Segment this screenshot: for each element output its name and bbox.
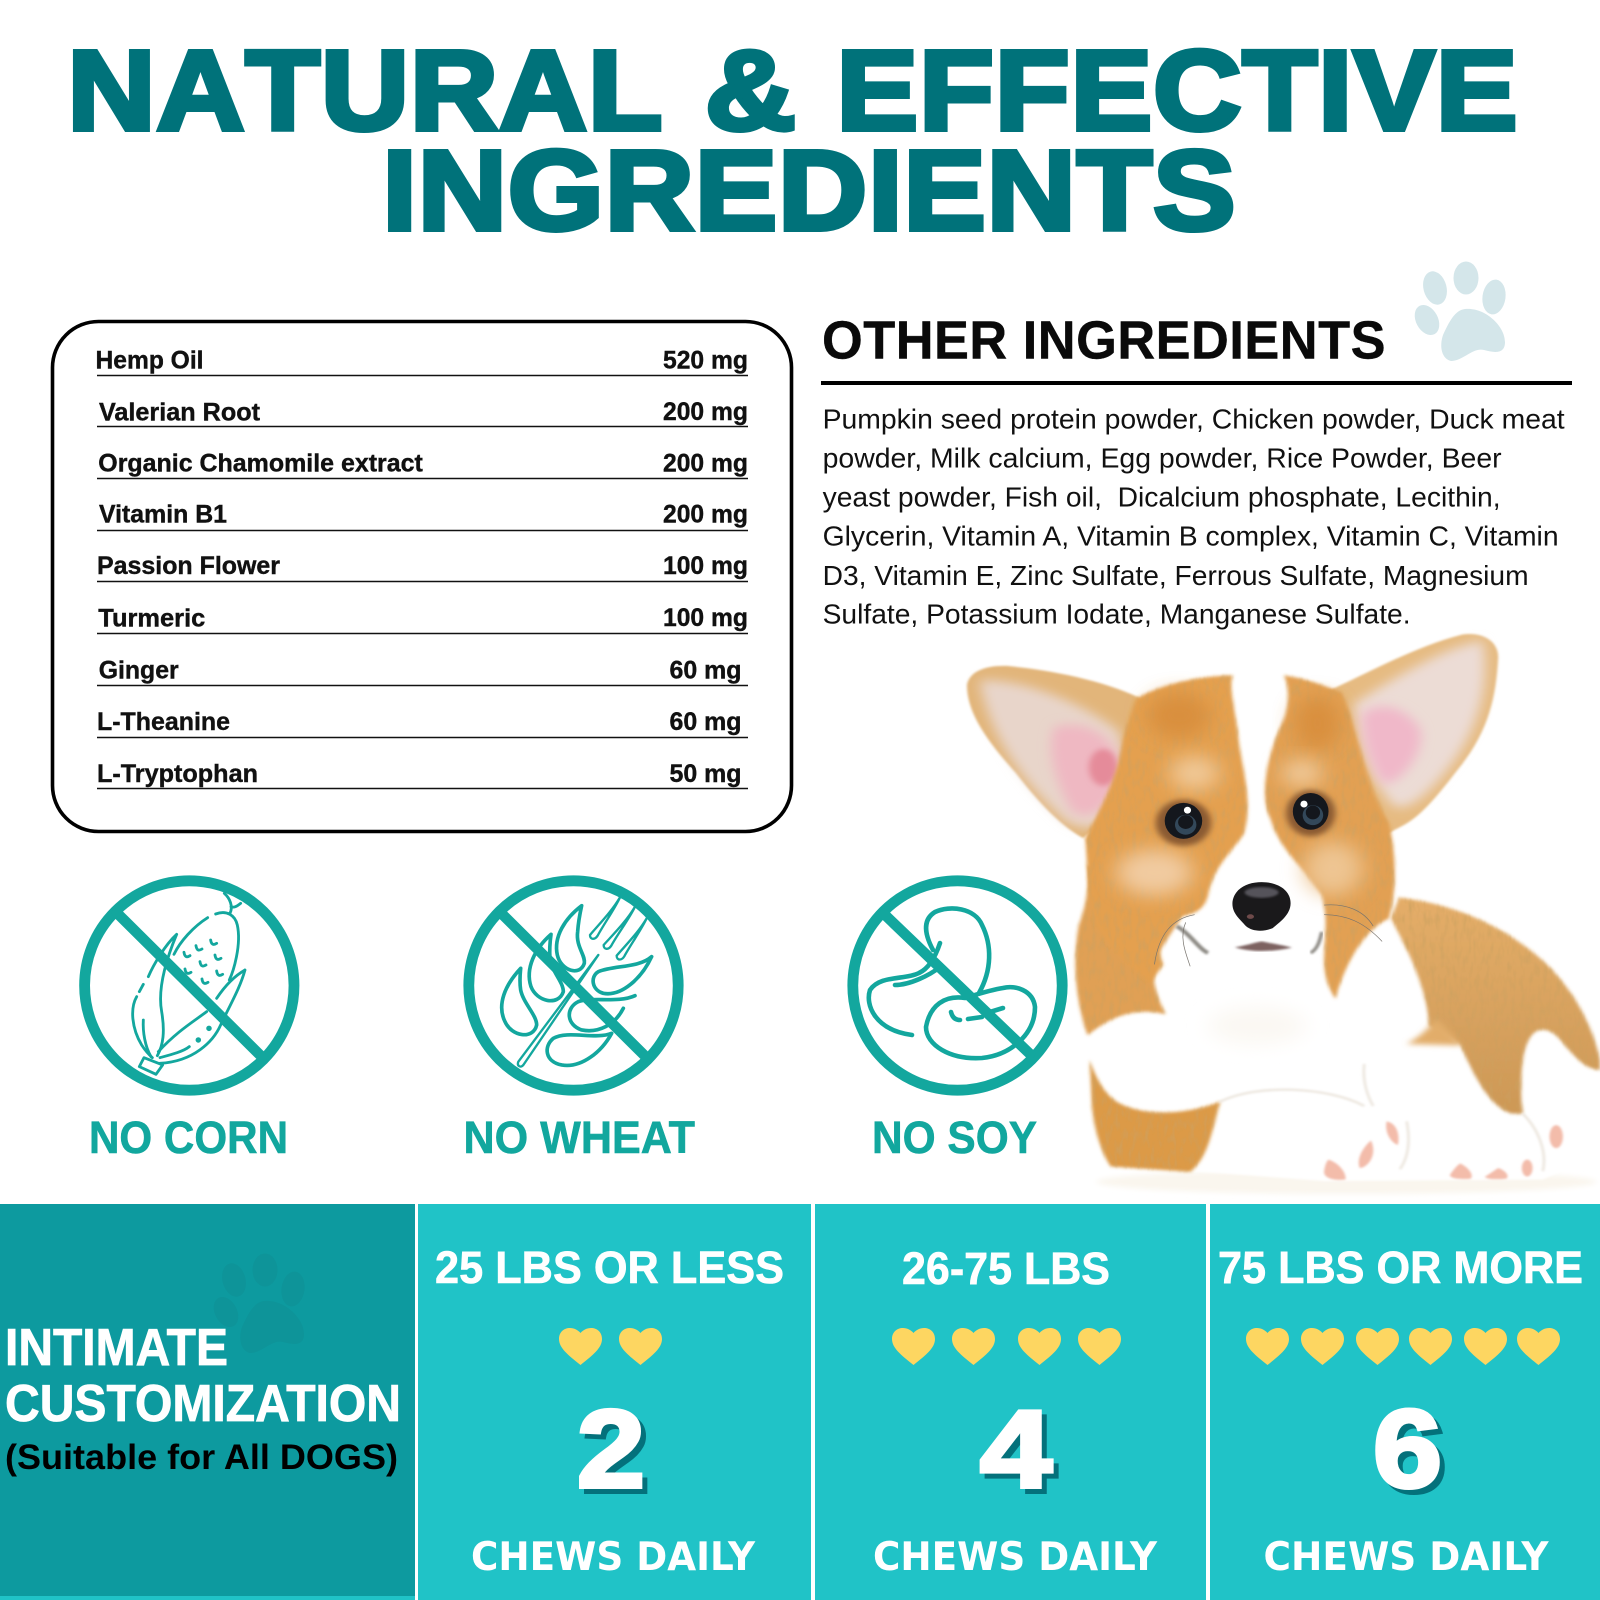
title: & [705,28,797,154]
back fur [1391,897,1600,1114]
label: no wheat: NO WHEAT [464,1112,695,1163]
text block: other ingredients list [823,403,1565,630]
left ear pink [1051,725,1121,815]
mouth [1235,941,1292,951]
dog base silhouette [1074,674,1600,1181]
left ear [967,666,1141,838]
panel: 75 lbs or more: 75 LBS OR MORE [1218,1242,1583,1293]
icon: no soy [853,881,1062,1090]
right ear [1324,634,1498,834]
panel: 75 lbs or more [1210,1204,1600,1600]
text block: other ingredients list: D3, Vitamin E, Zinc Sulfate, Ferrous Sulfate, Magnesium [823,560,1529,591]
text block: other ingredients list: Glycerin, Vitamin A, Vitamin B complex, Vitamin C, Vitamin [823,521,1559,552]
row: Vitamin B1: Vitamin B1 [99,501,227,529]
whiskers [1154,905,1382,966]
row: Ginger [97,656,748,686]
panel: 26-75 lbs [815,1204,1206,1600]
right eye [1293,793,1329,830]
row: Passion Flower: Passion Flower [97,552,280,580]
row: Turmeric [97,604,748,634]
row: Hemp Oil [96,347,748,376]
row: Valerian Root [97,398,748,426]
text block: other ingredients list: powder, Milk calcium, Egg powder, Rice Powder, Beer [823,443,1502,474]
row: Turmeric: 100 mg [663,604,748,632]
row: Organic Chamomile extract: 200 mg [663,450,748,478]
number: 4 [980,1388,1052,1511]
panel: ingredient table [52,322,792,832]
panel: 75 lbs or more: CHEWS DAILY [1264,1535,1549,1580]
panel: 25 lbs or less: 25 LBS OR LESS [435,1242,784,1293]
fur highlights [1117,850,1192,896]
text block: other ingredients list: Sulfate, Potassium Iodate, Manganese Sulfate. [823,598,1411,630]
row: Valerian Root: 200 mg [663,398,748,426]
hearts [559,1328,662,1365]
right ear pink [1362,707,1421,783]
row: L-Theanine: L-Theanine [97,708,230,736]
icon: no corn [85,881,294,1090]
floor shadow [1096,1170,1596,1194]
icon: no wheat [469,881,678,1090]
icon: light paw print [1410,262,1508,361]
eye sockets [1156,800,1211,846]
panel: 26-75 lbs: CHEWS DAILY [873,1535,1158,1580]
upper left orange chest [1075,865,1186,1035]
row: Ginger: Ginger [99,656,179,684]
left ear inner [979,680,1123,828]
text block: other ingredients list: Pumpkin seed protein powder, Chicken powder, Duck meat [823,403,1565,434]
row: L-Theanine [97,708,748,738]
label: no corn: NO CORN [89,1112,288,1163]
row: Vitamin B1 [97,501,748,530]
text block: other ingredients list: yeast powder, Fish oil, Dicalcium phosphate, Lecithin, [823,482,1501,513]
row: L-Tryptophan [97,760,748,788]
right ear inner [1353,641,1485,807]
label: no soy: NO SOY [872,1112,1037,1163]
corn [133,893,245,1074]
paw shading [1219,1064,1544,1171]
row: Organic Chamomile extract [97,450,748,478]
heading [5,1319,401,1433]
row: Valerian Root: Valerian Root [99,398,261,426]
darker crown fur [1148,693,1210,739]
title [68,28,1518,254]
orange leg patch [1407,1018,1462,1046]
number: 2 [577,1388,645,1511]
lower left orange chest [1090,1060,1221,1172]
nose [1232,882,1291,931]
row: Turmeric: Turmeric [98,604,205,632]
panel: 26-75 lbs: 26-75 LBS [902,1243,1110,1294]
title: EFFECTIVE [836,28,1518,154]
row: Passion Flower: 100 mg [663,552,748,580]
row: L-Tryptophan: 50 mg [670,760,742,788]
row: Organic Chamomile extract: Organic Chamomile extract [98,450,423,478]
panel: 25 lbs or less [418,1204,811,1600]
row: Passion Flower [97,552,748,582]
panel: 25 lbs or less: CHEWS DAILY [471,1535,756,1580]
left eye [1165,803,1202,839]
row: L-Theanine: 60 mg [670,708,742,736]
hearts [892,1328,1121,1365]
row: Vitamin B1: 200 mg [663,501,748,529]
title: INGREDIENTS [382,128,1236,254]
title: NATURAL [68,28,664,154]
row: Hemp Oil: Hemp Oil [96,347,204,375]
muzzle shading [1177,926,1208,953]
chest shading [1208,1007,1306,1045]
wheat [502,897,652,1067]
toe pads [1324,1121,1563,1180]
row: L-Tryptophan: L-Tryptophan [97,760,258,788]
head left fur [1085,675,1248,984]
hearts [1246,1328,1560,1365]
icon: faint paw [209,1254,307,1353]
number: 6 [1373,1388,1442,1511]
head right fur [1265,675,1395,999]
subheading: (Suitable for All DOGS) [5,1438,398,1477]
soy beans [869,908,1035,1058]
panel: customization [0,1204,415,1600]
row: Hemp Oil: 520 mg [663,347,748,375]
illustration: corgi puppy [967,634,1600,1194]
row: Ginger: 60 mg [670,656,742,684]
heading: INTIMATE [5,1319,228,1377]
heading: other ingredients: OTHER INGREDIENTS [822,311,1386,371]
heading: CUSTOMIZATION [5,1375,401,1433]
